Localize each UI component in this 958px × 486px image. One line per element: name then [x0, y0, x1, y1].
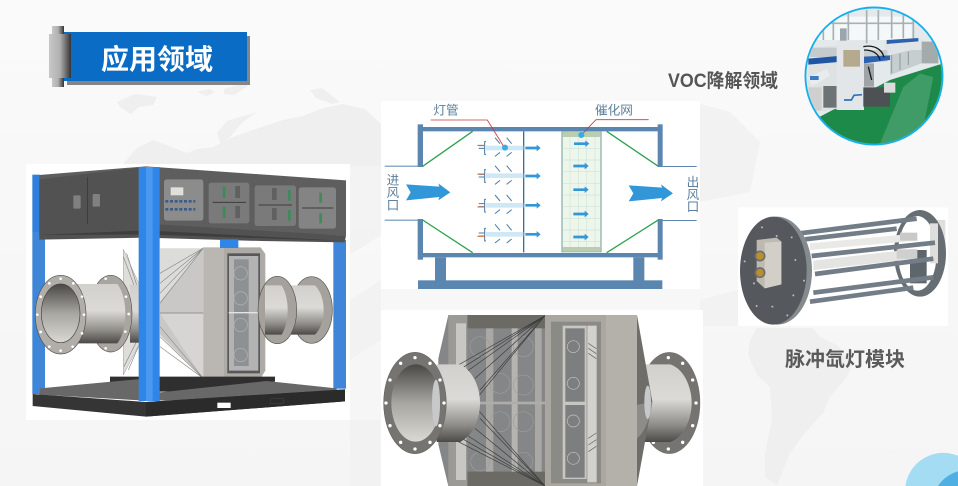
panel: inner reactor view — [381, 310, 703, 486]
top control cabinet — [39, 166, 346, 242]
right pipe and flange — [637, 315, 700, 486]
base frame — [33, 377, 345, 417]
brass terminals — [755, 251, 765, 277]
schematic labels: 风 — [387, 186, 400, 200]
schematic labels: 风 — [687, 188, 700, 202]
green deflectors — [423, 131, 658, 253]
lamp tubes — [810, 233, 917, 270]
panel: UV module 3D render — [26, 164, 350, 420]
schematic labels — [387, 103, 700, 214]
rear ring — [894, 210, 946, 297]
front blue frame post — [139, 167, 238, 401]
rear blue frame posts — [32, 175, 346, 394]
far machines — [885, 39, 928, 55]
terminal block — [757, 238, 781, 288]
front panel — [545, 315, 637, 486]
corner decoration circles — [905, 453, 958, 486]
housing outline — [385, 124, 697, 289]
floor — [820, 64, 942, 144]
motor block — [863, 87, 890, 107]
support rods — [800, 219, 935, 302]
panel: process schematic — [381, 101, 700, 289]
schematic labels: 口 — [687, 200, 699, 214]
right flange and pipe — [258, 276, 332, 344]
callout dots — [502, 132, 584, 151]
front plate — [740, 217, 812, 325]
left pipe and flange — [384, 352, 480, 454]
background world map — [117, 83, 853, 486]
lamp tubes — [477, 131, 524, 252]
left flange and pipe — [35, 275, 140, 354]
catalyst mesh — [562, 132, 601, 252]
schematic labels: 催化网 — [595, 103, 633, 117]
hood and duct body — [123, 247, 265, 379]
panel: pulsed xenon lamp module — [738, 207, 948, 326]
airflow arrows — [406, 140, 673, 240]
section heading banner — [49, 26, 250, 87]
photo: factory production line — [805, 8, 943, 147]
rear box — [930, 220, 945, 265]
schematic labels: 灯管 — [433, 103, 459, 117]
schematic labels: 口 — [387, 199, 399, 213]
heading text: 应用领域 — [101, 44, 213, 75]
caption: pulsed xenon lamp module: 脉冲氙灯模块 — [785, 348, 905, 371]
label: VOC degradation: VOC降解领域 — [668, 70, 778, 92]
hood and interior — [438, 315, 546, 486]
main machine — [808, 45, 838, 112]
callout lines — [431, 120, 649, 148]
schematic labels: 出 — [687, 175, 699, 189]
schematic labels: 进 — [387, 173, 400, 187]
